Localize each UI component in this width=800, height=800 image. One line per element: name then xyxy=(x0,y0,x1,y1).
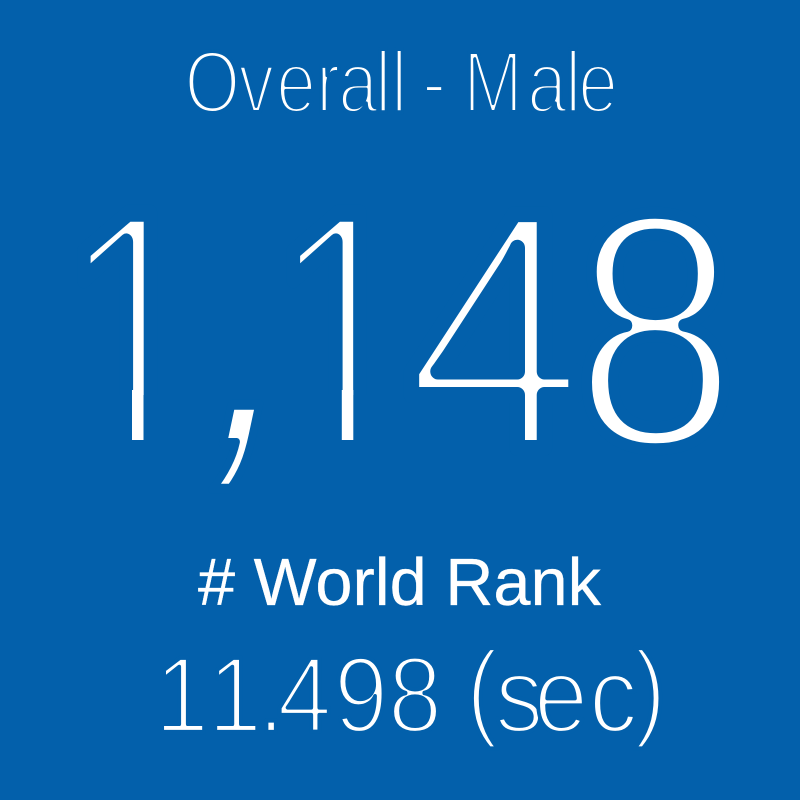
big number xyxy=(90,218,720,484)
metric label: # World Rank xyxy=(198,546,602,620)
big number: 4 xyxy=(404,140,586,520)
metric value: 11.498 (sec) xyxy=(155,628,666,755)
big number: , xyxy=(180,120,346,520)
infographic card xyxy=(90,51,720,746)
big number: 1 xyxy=(58,139,210,521)
big number: 8 xyxy=(574,143,737,517)
title: Overall - Male xyxy=(185,33,618,131)
big number: 1 xyxy=(267,139,419,521)
